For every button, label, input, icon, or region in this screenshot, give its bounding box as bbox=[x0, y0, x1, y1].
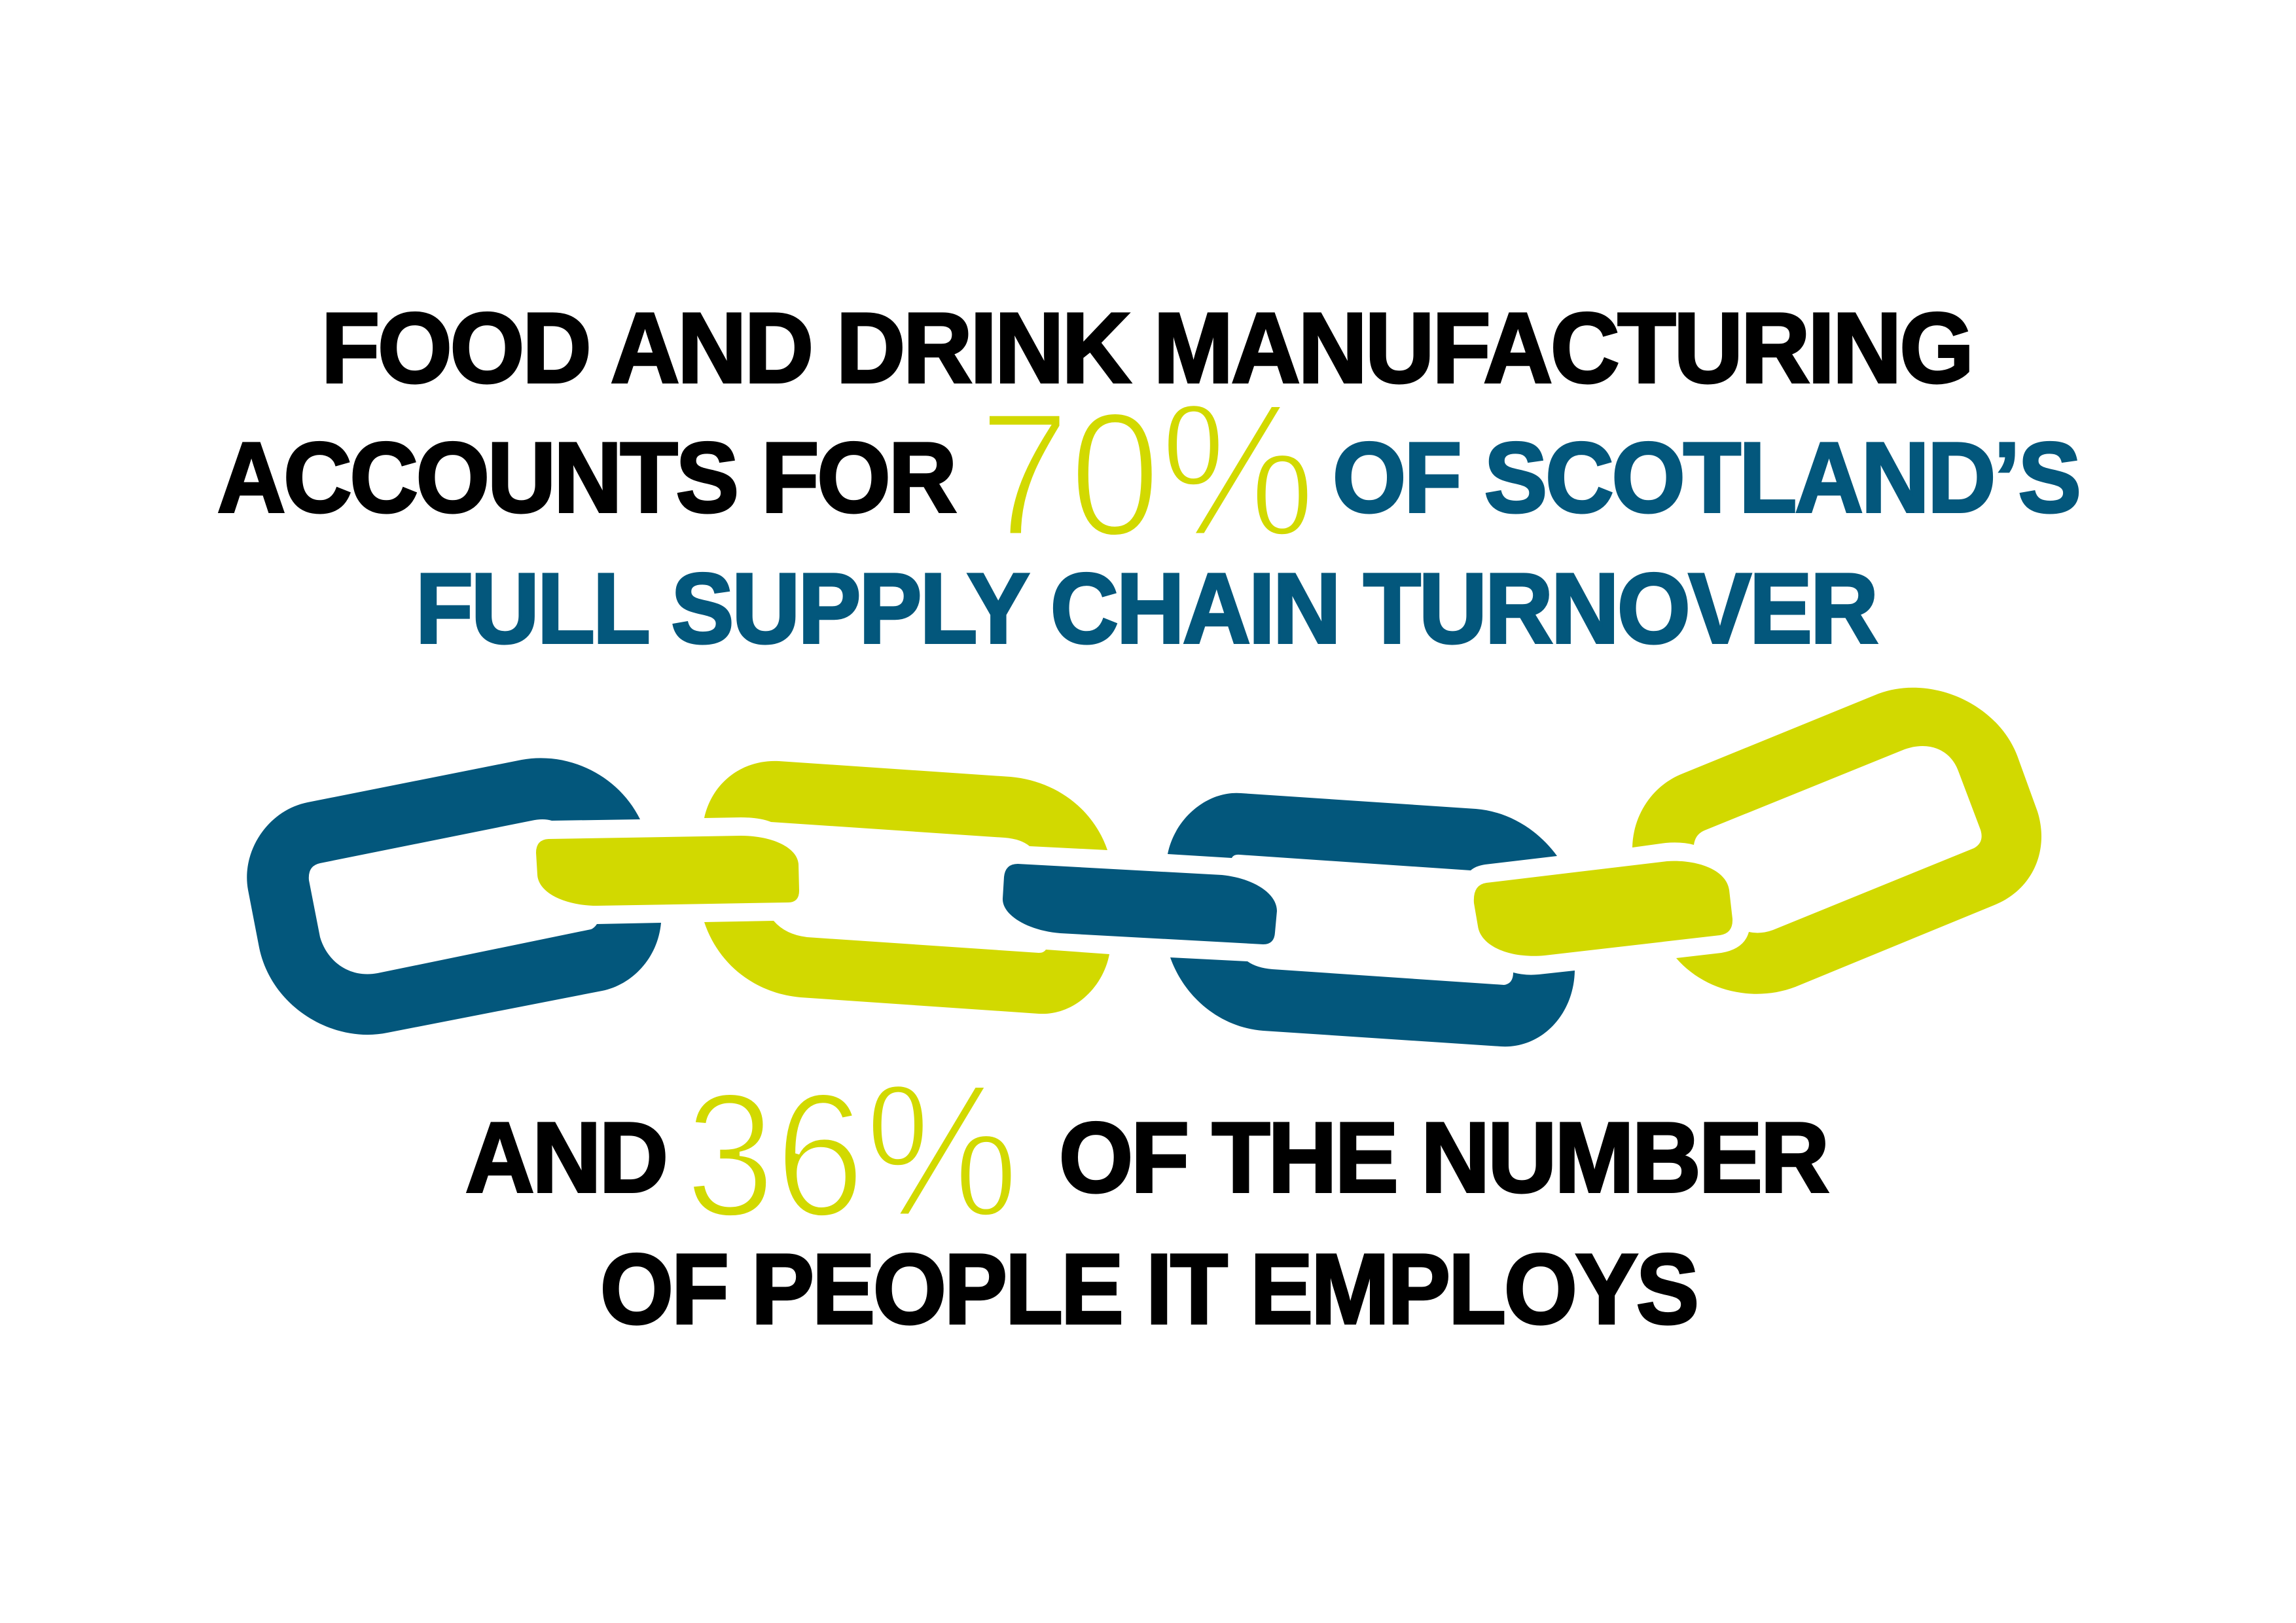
chain illustration bbox=[247, 688, 2041, 1046]
text: line 3: FULL SUPPLY CHAIN TURNOVER bbox=[416, 553, 1876, 664]
headline: bottom statement bbox=[465, 1044, 1827, 1345]
chain link 2 lower: yellow bbox=[704, 921, 1109, 1014]
text: line 4 lead: AND bbox=[465, 1102, 666, 1213]
text: line 1: FOOD AND DRINK MANUFACTURING bbox=[321, 293, 1972, 404]
chain link 4: yellow bbox=[1632, 688, 2041, 994]
text: line 5: OF PEOPLE IT EMPLOYS bbox=[600, 1234, 1697, 1345]
chain link 3 upper: blue bbox=[1168, 793, 1557, 870]
chain link 3 lower: blue bbox=[1170, 957, 1575, 1046]
text: line 4 tail: OF THE NUMBER bbox=[1059, 1102, 1827, 1213]
headline: top statement bbox=[217, 293, 2079, 664]
chain link 1: blue bbox=[247, 758, 661, 1035]
chain tab: yellow bbox=[536, 836, 799, 906]
stat: 70%: 70% bbox=[979, 364, 1316, 576]
chain tab: yellow right bbox=[1474, 861, 1732, 956]
chain tab: blue bbox=[1003, 864, 1277, 944]
text: line 2 lead: ACCOUNTS FOR bbox=[217, 422, 955, 533]
text: line 2 tail: OF SCOTLAND’S bbox=[1333, 422, 2079, 533]
stat: 36%: 36% bbox=[685, 1044, 1019, 1257]
chain link 2 upper: yellow bbox=[704, 761, 1107, 850]
